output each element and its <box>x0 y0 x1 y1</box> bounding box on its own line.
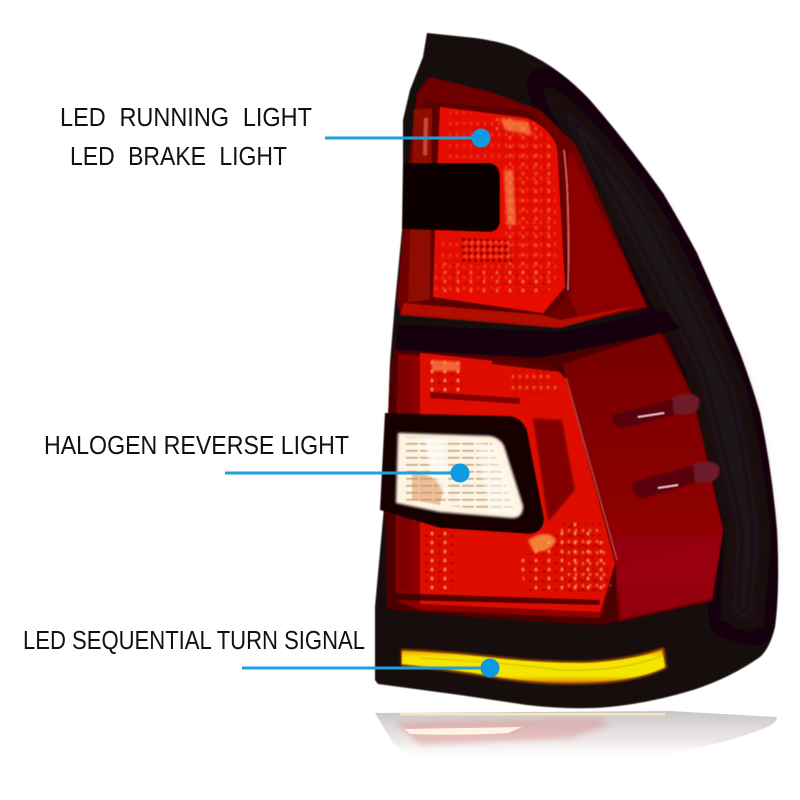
reflection under the lamp <box>375 711 777 764</box>
side lens fins <box>612 394 720 498</box>
marker dot <box>480 658 500 678</box>
label: LED running light: LED RUNNING LIGHT <box>60 102 312 132</box>
label: LED brake light: LED BRAKE LIGHT <box>70 141 287 171</box>
callout: halogen reverse light <box>44 430 470 482</box>
label: LED sequential turn signal: LED SEQUENTIAL TURN SIGNAL <box>23 625 365 655</box>
leader line <box>325 136 481 140</box>
label: halogen reverse light: HALOGEN REVERSE LIGHT <box>44 430 349 460</box>
callout: LED running and brake light <box>60 102 490 171</box>
callout: sequential turn signal <box>23 625 500 678</box>
dark divider band <box>396 310 680 362</box>
lower lens <box>385 333 723 625</box>
reverse light lens <box>396 433 523 518</box>
marker dot <box>450 464 470 482</box>
marker dot <box>472 128 490 148</box>
upper lens <box>397 77 647 328</box>
side panel <box>563 333 723 622</box>
sequential turn signal strip <box>401 647 667 684</box>
reverse light frame <box>380 413 544 534</box>
outer dark housing <box>375 33 778 708</box>
black notch <box>402 163 500 232</box>
tail light assembly <box>375 33 778 708</box>
leader line <box>225 472 460 474</box>
leader line <box>242 666 490 670</box>
